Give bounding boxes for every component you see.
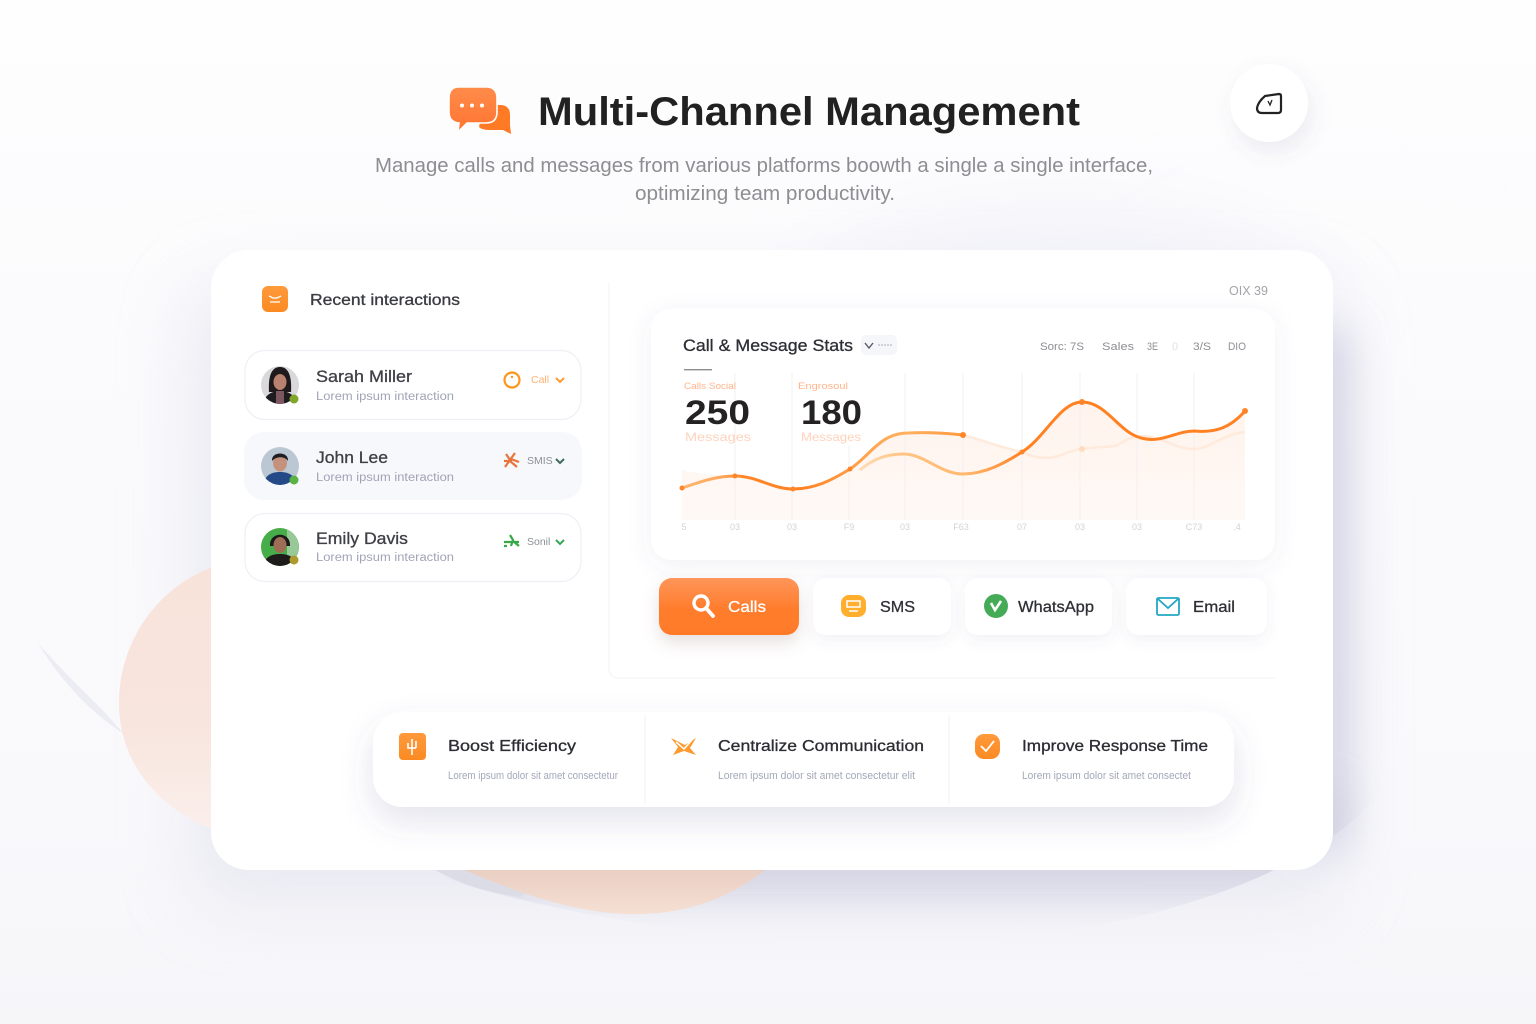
main line (682, 433, 963, 489)
badge: call: Call (531, 374, 549, 386)
stat: 250: Messages (685, 432, 751, 444)
chart title: Call & Message Stats (683, 336, 853, 355)
benefits panel (373, 712, 1234, 807)
benefit: Centralize Communication: Centralize Communication (718, 738, 924, 755)
chart header legend (1040, 341, 1246, 353)
channel button: Calls: Calls (728, 599, 766, 616)
stat: 180: Engrosoul (798, 381, 848, 392)
avatar: John (261, 447, 299, 485)
benefit: Centralize Communication: Lorem ipsum dolor sit amet consectetur elit (718, 770, 915, 782)
chart header legend: 3/S (1193, 341, 1211, 353)
badge: SMS (504, 453, 564, 467)
row: John Lee: Lorem ipsum interaction (316, 472, 454, 484)
x axis labels: 07 (1017, 522, 1027, 532)
stat: 250: 250 (685, 394, 750, 432)
background (39, 238, 1376, 932)
row: Emily Davis: Lorem ipsum interaction (316, 552, 454, 564)
benefit: Centralize Communication (671, 738, 924, 782)
channel button: Calls (659, 578, 799, 635)
stat: 250: Calls Social (684, 381, 736, 392)
row: John Lee: John Lee (316, 448, 388, 467)
second line (860, 452, 1022, 474)
row: Emily Davis (245, 514, 581, 582)
row: Sarah Miller: Lorem ipsum interaction (316, 391, 454, 403)
benefit: Boost Efficiency: Boost Efficiency (448, 738, 576, 755)
x axis labels: F9 (844, 522, 854, 532)
benefit: Boost Efficiency (399, 733, 618, 782)
top-right round icon button (1230, 64, 1308, 142)
decorative peach shape bottom (455, 866, 770, 914)
subtitle: Manage calls and messages from various platforms boowth a single a single interface, (375, 154, 1153, 177)
channel button: WhatsApp: WhatsApp (1018, 599, 1094, 616)
subtitle: optimizing team productivity. (635, 182, 895, 205)
area under curves (682, 402, 1245, 520)
benefit: Boost Efficiency: Lorem ipsum dolor sit amet consectetur (448, 770, 618, 782)
dropdown chip (861, 335, 897, 355)
benefit: Improve Response Time (975, 734, 1208, 782)
chart data points (680, 399, 1248, 492)
channel button: SMS: SMS (880, 599, 915, 616)
channel button: WhatsApp (965, 578, 1112, 635)
avatar: Sarah (261, 366, 299, 404)
row: John Lee (244, 432, 582, 500)
x axis labels: 03 (1132, 522, 1142, 532)
subtitle (375, 154, 1153, 205)
x axis labels: F63 (953, 522, 969, 532)
top right status label: OIX 39 (1229, 284, 1268, 298)
x axis labels: C73 (1186, 522, 1202, 532)
stat: 180: 180 (801, 394, 862, 432)
stat: 180: Messages (801, 432, 861, 444)
channel button: Email (1126, 578, 1267, 635)
x axis labels: .4 (1233, 522, 1241, 532)
row: Sarah Miller (245, 350, 581, 420)
chart header legend: 3E (1147, 341, 1158, 353)
header icon: chat bubbles (449, 87, 511, 134)
row: Emily Davis: Emily Davis (316, 529, 408, 548)
badge: Sonit: Sonil (527, 536, 550, 548)
stat: 250 (684, 381, 751, 444)
chart header legend: Sorc: 7S (1040, 341, 1084, 353)
panel heading: recent interactions: Recent interactions (310, 292, 460, 309)
badge: SMS: SMIS (527, 455, 553, 467)
chart header legend: 0 (1172, 341, 1178, 353)
stat: 180 (798, 381, 862, 444)
pale series continuation (963, 432, 1245, 458)
panel heading: recent interactions (262, 286, 460, 312)
grid lines (735, 373, 1194, 520)
benefit: Improve Response Time: Improve Response Time (1022, 738, 1208, 755)
avatar: Emily (261, 528, 299, 566)
x axis labels: 03 (900, 522, 910, 532)
channel button: Email: Email (1193, 599, 1235, 616)
x axis labels (681, 522, 1241, 532)
benefit: Improve Response Time: Lorem ipsum dolor sit amet consectet (1022, 770, 1191, 782)
badge: Sonit (504, 535, 564, 548)
decorative peach shape left (119, 566, 215, 830)
x axis labels: 5 (681, 522, 687, 532)
badge: call (504, 372, 564, 388)
title underline (684, 369, 712, 370)
row: Sarah Miller: Sarah Miller (316, 367, 412, 386)
channel button: SMS (813, 578, 951, 635)
x axis labels: 03 (1075, 522, 1085, 532)
chart header legend: DIO (1228, 341, 1246, 353)
vertical divider and chart section frame (609, 283, 1275, 678)
stats chart card (651, 309, 1275, 560)
title: Multi-Channel Management (538, 90, 1080, 134)
x axis labels: 03 (787, 522, 797, 532)
x axis labels: 03 (730, 522, 740, 532)
main dashboard card (211, 250, 1333, 870)
chart header legend: Sales (1102, 341, 1135, 353)
